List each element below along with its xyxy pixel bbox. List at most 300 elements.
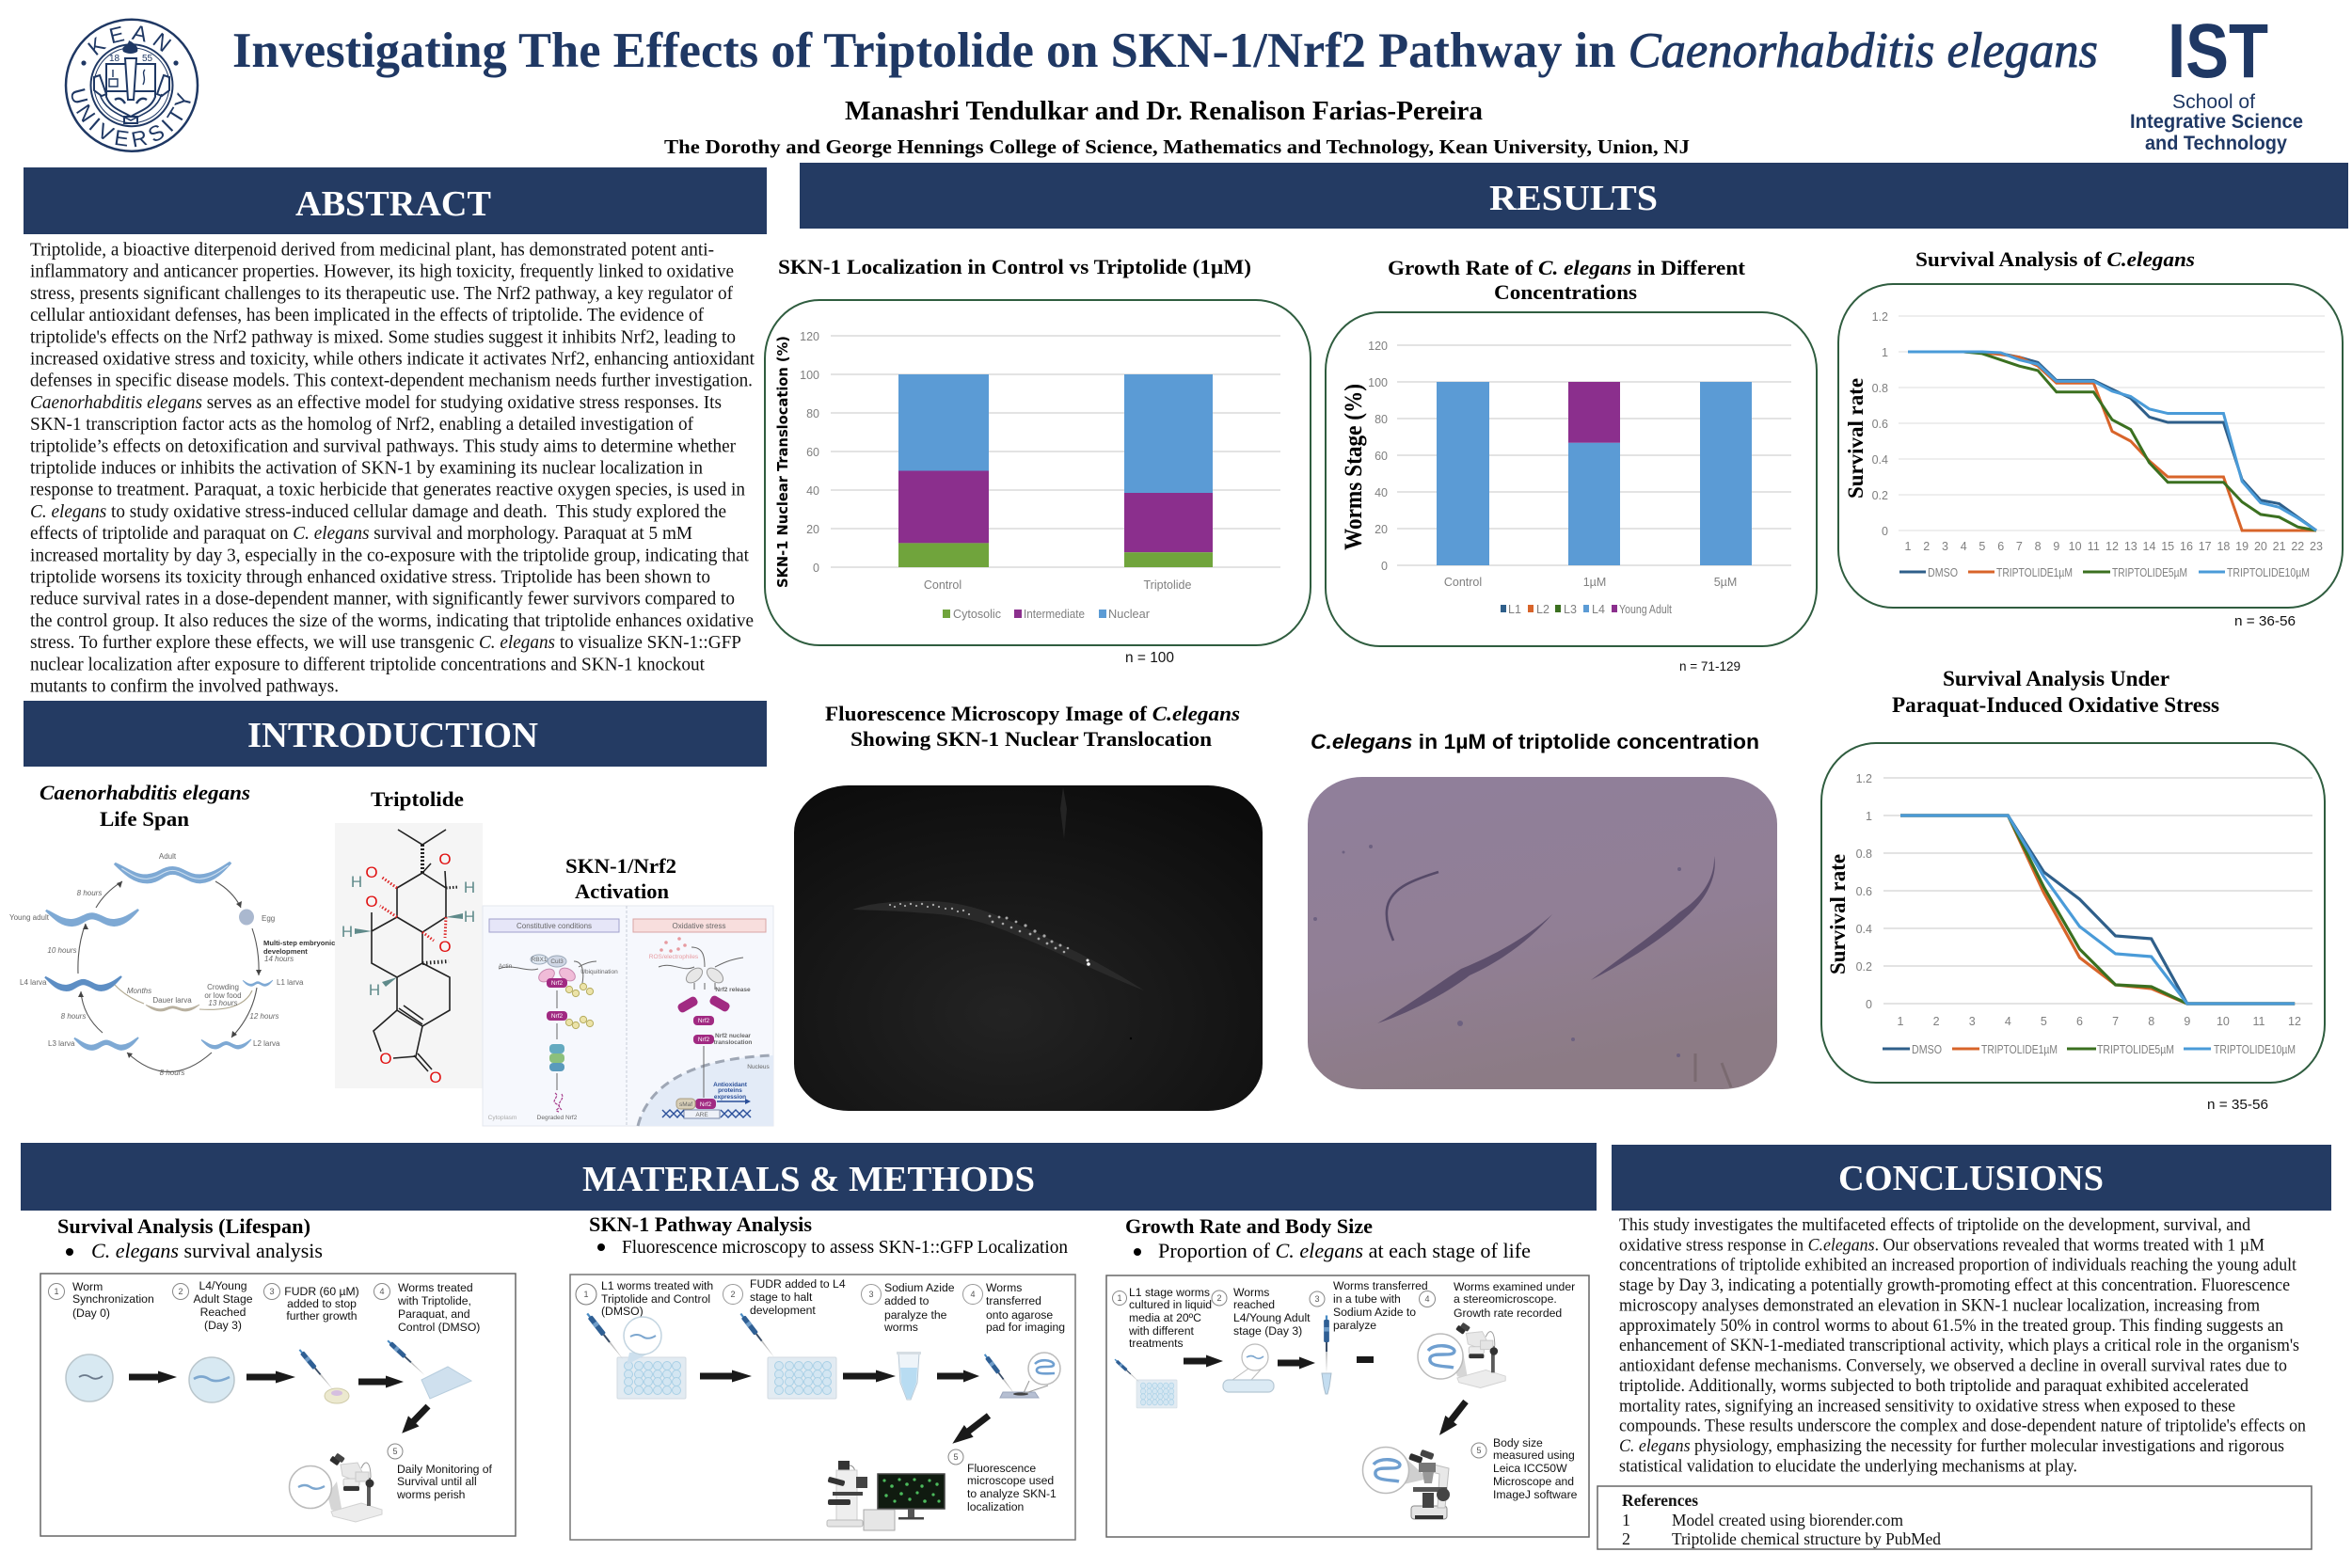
step 5: Leica ICC50W bbox=[1493, 1462, 1567, 1475]
heading: survival analysis chart: Survival Analysis of C.elegans bbox=[1915, 247, 2195, 271]
line chart: survival analysis: 18 bbox=[2217, 540, 2230, 553]
step 3: worms bbox=[883, 1321, 918, 1334]
diagram: SKN-1/Nrf2 activation pathway: Nrf2 bbox=[551, 1013, 564, 1020]
bar chart: SKN-1 localization: 60 bbox=[806, 446, 819, 459]
annotation: n = 36-56: n = 36-56 bbox=[2234, 613, 2296, 629]
diagram: C. elegans life cycle: L1 larva bbox=[277, 978, 304, 987]
arrow bbox=[947, 1410, 993, 1449]
step 4: Worms bbox=[986, 1281, 1022, 1294]
line chart: survival analysis: 8 bbox=[2035, 540, 2042, 553]
text block: conclusions: enhancement of SKN-1-mediated transcriptional activity, which plays a critical role in the organism's bbox=[1619, 1336, 2299, 1355]
step 5: Fluorescence bbox=[967, 1462, 1036, 1475]
diagram: SKN-1/Nrf2 activation pathway: Cytoplasm bbox=[488, 1115, 516, 1121]
legend bbox=[943, 608, 1150, 621]
step 3 bbox=[263, 1283, 359, 1403]
diagram: SKN-1 pathway workflow bbox=[570, 1275, 1075, 1540]
panel: references: Model created using biorender.com bbox=[1672, 1511, 1903, 1529]
step 2: L4/Young Adult bbox=[1233, 1311, 1311, 1324]
step 1: Triptolide and Control bbox=[601, 1292, 710, 1306]
text block: abstract: C. elegans to study oxidative stress-induced cellular damage and death. This study explored the bbox=[30, 501, 726, 522]
heading: C. elegans life span bbox=[40, 781, 250, 831]
heading: paraquat survival chart: Survival Analysis Under bbox=[1943, 667, 2169, 690]
diagram: C. elegans life cycle: or low food bbox=[204, 991, 242, 1000]
line chart: survival analysis: 5 bbox=[1979, 540, 1985, 553]
text block: conclusions: mortality rates, signifying an increased sensitivity to oxidative stress when exposed to these bbox=[1619, 1396, 2235, 1416]
diagram: SKN-1/Nrf2 activation pathway: Degraded Nrf2 bbox=[537, 1115, 578, 1121]
text block: conclusions: triptolide. Additionally, worms subjected to both triptolide and paraquat exhibited accelerated bbox=[1619, 1376, 2249, 1396]
bar chart: SKN-1 localization: 120 bbox=[800, 330, 819, 343]
legend bbox=[1899, 566, 2310, 579]
arrow bbox=[843, 1370, 896, 1383]
arrow bbox=[1278, 1356, 1315, 1370]
step 1 bbox=[49, 1280, 154, 1402]
step 3: 3 bbox=[1314, 1294, 1320, 1304]
heading: SKN-1 localization chart: SKN-1 Localization in Control vs Triptolide (1µM) bbox=[778, 255, 1251, 278]
image: worms at 1µM triptolide bbox=[1308, 777, 1777, 1089]
line chart: survival analysis: 3 bbox=[1942, 540, 1948, 553]
step 3: added to bbox=[884, 1294, 930, 1307]
logo: IST School of Integrative Science and Technology bbox=[2130, 8, 2303, 154]
logo: IST School of Integrative Science and Technology: Integrative Science bbox=[2130, 111, 2303, 133]
step 2 bbox=[1212, 1286, 1311, 1392]
line chart: survival under paraquat: 0.2 bbox=[1856, 960, 1872, 974]
legend: Intermediate bbox=[1024, 608, 1085, 621]
diagram: SKN-1/Nrf2 activation pathway: Nrf2 bbox=[698, 1018, 710, 1024]
step 4 bbox=[1418, 1280, 1575, 1387]
line chart: survival analysis: 0 bbox=[1882, 525, 1888, 538]
text block: abstract: stress, presents significant challenges to its therapeutic use. The Nrf2 pathway, a key regulator of bbox=[30, 283, 733, 304]
line chart: survival analysis: 2 bbox=[1923, 540, 1930, 553]
annotation: n = 71-129: n = 71-129 bbox=[1679, 658, 1740, 673]
step 1: 1 bbox=[54, 1287, 59, 1296]
step 1: (DMSO) bbox=[601, 1305, 644, 1318]
panel: materials and methods header bbox=[21, 1143, 1597, 1211]
text block: abstract: nuclear localization after exposure to different triptolide concentrations and SKN-1 knockout bbox=[30, 654, 705, 674]
line chart: survival analysis: 22 bbox=[2291, 540, 2304, 553]
line chart: survival under paraquat: 11 bbox=[2253, 1015, 2265, 1028]
bars: Triptolide bbox=[1124, 374, 1213, 567]
bar chart: growth rate stages: 120 bbox=[1368, 340, 1388, 353]
step 5: worms perish bbox=[396, 1488, 465, 1501]
diagram: C. elegans life cycle: 13 hours bbox=[208, 999, 238, 1007]
step 5 bbox=[827, 1449, 1057, 1530]
step 4: 4 bbox=[379, 1287, 385, 1296]
step 3: in a tube with bbox=[1333, 1292, 1401, 1306]
step 4: Control (DMSO) bbox=[398, 1321, 480, 1334]
line chart: survival analysis: 12 bbox=[2106, 540, 2119, 553]
diagram: SKN-1/Nrf2 activation pathway: Nrf2 release bbox=[715, 987, 751, 993]
arrow fragment bbox=[1357, 1356, 1374, 1363]
logo: Kean University seal: 18 bbox=[109, 54, 120, 64]
panel: results header bbox=[800, 163, 2348, 229]
step 1 bbox=[1112, 1286, 1212, 1408]
diagram: SKN-1/Nrf2 activation pathway: Nucleus bbox=[747, 1064, 770, 1070]
diagram: SKN-1/Nrf2 activation pathway: sMaf bbox=[679, 1101, 692, 1108]
diagram: C. elegans life cycle: Dauer larva bbox=[152, 996, 192, 1005]
bar chart: SKN-1 localization: 40 bbox=[806, 484, 819, 498]
text block: abstract: the control group. It also reduces the size of the worms, indicating that triptolide enhances oxidative bbox=[30, 610, 754, 631]
bar chart: growth rate stages: Control bbox=[1444, 576, 1482, 589]
bar chart: growth rate stages: 5µM bbox=[1714, 576, 1737, 589]
diagram: SKN-1/Nrf2 activation pathway: proteins bbox=[718, 1087, 742, 1094]
panel: introduction header: INTRODUCTION bbox=[247, 716, 538, 755]
step 1 bbox=[576, 1279, 713, 1399]
diagram: triptolide chemical structure: O bbox=[429, 1069, 442, 1086]
heading: survival analysis method bbox=[57, 1214, 323, 1262]
text block: abstract: response to treatment. Paraquat, a toxic herbicide that generates reactive oxygen species, is used in bbox=[30, 480, 745, 500]
step 4: a stereomicroscope. bbox=[1454, 1292, 1557, 1306]
diagram: C. elegans life cycle: Crowding bbox=[207, 983, 239, 991]
diagram: C. elegans life cycle: Adult bbox=[159, 852, 177, 861]
heading: SKN-1/Nrf2 activation: Activation bbox=[575, 879, 669, 903]
authors: Manashri Tendulkar and Dr. Renalison Farias-Pereira bbox=[845, 97, 1483, 126]
line chart: survival analysis: 7 bbox=[2016, 540, 2023, 553]
text block: abstract bbox=[30, 239, 755, 696]
legend: Nuclear bbox=[1108, 608, 1150, 621]
diagram: SKN-1/Nrf2 activation pathway: RBX1 bbox=[532, 957, 548, 963]
arrow bbox=[700, 1370, 752, 1383]
bars: concentrations bbox=[1437, 382, 1752, 565]
diagram: SKN-1/Nrf2 activation pathway: expression bbox=[714, 1094, 746, 1101]
diagram: growth rate workflow bbox=[1106, 1275, 1589, 1537]
step 3 bbox=[1310, 1279, 1428, 1394]
diagram: SKN-1/Nrf2 activation pathway: ARE bbox=[695, 1112, 708, 1118]
logo: Kean University seal: 55 bbox=[142, 54, 153, 64]
arrow bbox=[246, 1371, 295, 1383]
bar chart: growth rate stages: Worms Stage (%) bbox=[1340, 384, 1367, 550]
step 4: pad for imaging bbox=[986, 1321, 1065, 1334]
step 4 bbox=[374, 1281, 480, 1399]
text block: abstract: cellular antioxidant defenses, has been implicated in the effects of triptolide. The evidence of bbox=[30, 305, 704, 325]
step 4: transferred bbox=[986, 1294, 1041, 1307]
bar chart: growth rate stages: 20 bbox=[1375, 523, 1388, 536]
heading: SKN-1 pathway method: Fluorescence microscopy to assess SKN-1::GFP Localization bbox=[622, 1237, 1068, 1258]
step 2: (Day 3) bbox=[204, 1319, 242, 1332]
diagram: SKN-1/Nrf2 activation pathway: Nrf2 bbox=[700, 1101, 712, 1108]
heading: SKN-1/Nrf2 activation bbox=[565, 854, 676, 903]
heading: Triptolide: Triptolide bbox=[371, 787, 464, 811]
diagram: C. elegans life cycle bbox=[9, 852, 335, 1077]
step 2: stage (Day 3) bbox=[1233, 1324, 1302, 1338]
text block: conclusions: concentrations of triptolide exhibited an increased proportion of individuals reaching the young adult bbox=[1619, 1256, 2297, 1275]
step 1: L1 stage worms bbox=[1129, 1286, 1210, 1299]
step 1: Synchronization bbox=[72, 1292, 154, 1306]
line chart: survival analysis: 14 bbox=[2143, 540, 2155, 553]
diagram: SKN-1/Nrf2 activation pathway: Nrf2 nuclear bbox=[715, 1033, 751, 1039]
step 1: L1 worms treated with bbox=[601, 1279, 713, 1292]
line chart: survival under paraquat: 0 bbox=[1866, 998, 1872, 1011]
line chart: survival analysis: 15 bbox=[2161, 540, 2174, 553]
diagram: C. elegans life cycle: development bbox=[263, 947, 308, 956]
diagram: C. elegans life cycle: L4 larva bbox=[20, 978, 47, 987]
diagram: triptolide chemical structure: O bbox=[365, 863, 378, 881]
diagram: C. elegans life cycle: 14 hours bbox=[264, 955, 294, 963]
step 5: Daily Monitoring of bbox=[397, 1463, 493, 1476]
bar chart: growth rate stages: 1µM bbox=[1583, 576, 1606, 589]
step 4: Worms treated bbox=[398, 1281, 473, 1294]
step 1: 1 bbox=[583, 1290, 589, 1299]
line chart: survival analysis: 0.2 bbox=[1872, 489, 1888, 502]
bar chart: SKN-1 localization: 100 bbox=[800, 369, 819, 382]
heading: paraquat survival chart: Paraquat-Induced Oxidative Stress bbox=[1892, 693, 2219, 717]
logo: IST School of Integrative Science and Technology: and Technology bbox=[2145, 133, 2287, 154]
line chart: survival analysis: 13 bbox=[2124, 540, 2137, 553]
step 2: Adult Stage bbox=[193, 1292, 253, 1306]
step 3: 3 bbox=[269, 1287, 275, 1296]
step 5: 5 bbox=[953, 1452, 959, 1462]
step 4: Worms examined under bbox=[1454, 1280, 1575, 1293]
bar chart: growth rate stages: 80 bbox=[1375, 413, 1388, 426]
step 4: with Triptolide, bbox=[397, 1294, 471, 1307]
text block: conclusions: stage by Day 3, indicating a potentially growth-promoting effect at this concentration. Fluorescence bbox=[1619, 1275, 2290, 1295]
diagram: triptolide chemical structure: O bbox=[438, 938, 452, 956]
text block: abstract: Triptolide, a bioactive diterpenoid derived from medicinal plant, has demonstrated potent anti- bbox=[30, 239, 714, 260]
panel: references: Triptolide chemical structure by PubMed bbox=[1672, 1529, 1941, 1548]
text block: abstract: defenses in specific disease models. This context-dependent mechanism needs further investigation. bbox=[30, 371, 753, 391]
arrow bbox=[1434, 1397, 1471, 1440]
panel: references bbox=[1597, 1486, 2312, 1549]
text block: abstract: increased oxidative stress and toxicity, while others indicate it activates Nrf2, enhancing antioxidant bbox=[30, 348, 755, 369]
step 2 bbox=[723, 1277, 846, 1399]
arrow bbox=[358, 1375, 404, 1388]
step 3: added to stop bbox=[287, 1297, 357, 1310]
heading: survival analysis method: C. elegans survival analysis bbox=[91, 1239, 323, 1262]
step 5: ImageJ software bbox=[1493, 1488, 1578, 1501]
line chart: survival analysis: 20 bbox=[2254, 540, 2267, 553]
line chart: survival analysis: 1.2 bbox=[1872, 310, 1888, 324]
step 3: 3 bbox=[868, 1290, 874, 1299]
heading: survival analysis method: Survival Analysis (Lifespan) bbox=[57, 1214, 310, 1238]
bar chart: growth rate stages: 0 bbox=[1381, 560, 1388, 573]
step 1: 1 bbox=[1117, 1293, 1122, 1303]
line chart: survival analysis: 9 bbox=[2053, 540, 2059, 553]
heading: growth rate chart bbox=[1388, 256, 1746, 304]
text block: abstract: triptolide’s effects on detoxification and survival pathways. This study aims to determine whether bbox=[30, 436, 736, 456]
diagram: C. elegans life cycle: 8 hours bbox=[160, 1069, 184, 1077]
arrow bbox=[396, 1401, 434, 1438]
diagram: survival analysis workflow bbox=[40, 1274, 516, 1536]
diagram: triptolide chemical structure: H bbox=[464, 908, 475, 926]
text block: abstract: triptolide's effects on the Nrf2 pathway is mixed. Some studies suggest it inhibits Nrf2, leading to bbox=[30, 326, 736, 347]
legend: TRIPTOLIDE1µM bbox=[1981, 1043, 2058, 1056]
bar chart: SKN-1 localization: Triptolide bbox=[1144, 578, 1192, 592]
legend: L3 bbox=[1564, 603, 1577, 616]
step 1: Worm bbox=[72, 1280, 103, 1293]
diagram: triptolide chemical structure: H bbox=[369, 981, 380, 999]
arrow bbox=[1184, 1354, 1223, 1368]
step 3: Sodium Azide bbox=[884, 1281, 955, 1294]
line chart: survival under paraquat: 4 bbox=[2005, 1015, 2011, 1028]
logo: IST School of Integrative Science and Technology: IST bbox=[2168, 8, 2268, 94]
step 5: Microscope and bbox=[1493, 1475, 1574, 1488]
diagram: SKN-1/Nrf2 activation pathway: Constitutive conditions bbox=[516, 922, 592, 930]
panel: conclusions header bbox=[1612, 1145, 2331, 1211]
legend: TRIPTOLIDE5µM bbox=[2097, 1043, 2174, 1056]
panel: conclusions header: CONCLUSIONS bbox=[1838, 1159, 2104, 1198]
bar chart: growth rate stages: 100 bbox=[1368, 376, 1388, 389]
step 5: 5 bbox=[392, 1447, 398, 1456]
legend: TRIPTOLIDE5µM bbox=[2112, 566, 2187, 579]
diagram: C. elegans life cycle: 8 hours bbox=[61, 1012, 86, 1021]
series lines bbox=[1900, 816, 2295, 1004]
diagram: SKN-1/Nrf2 activation pathway bbox=[483, 906, 773, 1126]
step 4: Growth rate recorded bbox=[1454, 1307, 1562, 1320]
step 5: Body size bbox=[1493, 1436, 1543, 1449]
bar chart: growth rate stages bbox=[1326, 312, 1817, 646]
bar chart: SKN-1 localization: Control bbox=[924, 578, 961, 592]
line chart: survival analysis: 23 bbox=[2310, 540, 2323, 553]
diagram: triptolide chemical structure: H bbox=[351, 873, 362, 891]
line chart: survival under paraquat: 1 bbox=[1898, 1015, 1904, 1028]
step 2: 2 bbox=[1216, 1293, 1222, 1303]
heading: C. elegans life span: Life Span bbox=[100, 807, 189, 831]
step 1: media at 20ºC bbox=[1129, 1311, 1201, 1324]
diagram: C. elegans life cycle: 10 hours bbox=[47, 946, 77, 955]
step 3: further growth bbox=[286, 1309, 358, 1323]
legend: DMSO bbox=[1928, 566, 1958, 579]
step 2: FUDR added to L4 bbox=[750, 1277, 846, 1291]
diagram: SKN-1/Nrf2 activation pathway: Nrf2 bbox=[551, 980, 564, 987]
text block: conclusions: compounds. These results underscore the complex and dose-dependent nature of triptolide's effects on bbox=[1619, 1417, 2306, 1436]
step 1: (Day 0) bbox=[72, 1307, 110, 1320]
text block: abstract: inflammatory and anticancer properties. However, its high toxicity, frequently linked to oxidative bbox=[30, 261, 734, 282]
line chart: survival analysis: 6 bbox=[1997, 540, 2004, 553]
panel: introduction header bbox=[24, 701, 767, 767]
step 3: paralyze bbox=[1333, 1319, 1376, 1332]
text block: conclusions: approximately 50% in control worms to about 61.5% in the treated group. This finding suggests an bbox=[1619, 1316, 2283, 1336]
heading: SKN-1 pathway method: SKN-1 Pathway Analysis bbox=[589, 1212, 812, 1236]
logo: Kean University seal: KEAN bbox=[87, 25, 171, 55]
text block: abstract: reduce survival rates in a dose-dependent manner, with significantly fewer survivors compared to bbox=[30, 589, 735, 610]
step 2: Worms bbox=[1233, 1286, 1269, 1299]
line chart: survival under paraquat: 3 bbox=[1969, 1015, 1976, 1028]
line chart: survival analysis: Survival rate bbox=[1844, 378, 1867, 499]
bar chart: SKN-1 localization: 20 bbox=[806, 523, 819, 536]
affiliation: The Dorothy and George Hennings College of Science, Mathematics and Technology, Kean University, Union, NJ bbox=[664, 135, 1690, 158]
diagram: C. elegans life cycle: 12 hours bbox=[249, 1012, 279, 1021]
panel: results header: RESULTS bbox=[1489, 179, 1658, 218]
text block: abstract: increased mortality by day 3, especially in the co-exposure with the triptolide group, indicating that bbox=[30, 545, 749, 565]
step 1: cultured in liquid bbox=[1129, 1298, 1212, 1311]
text block: abstract: Caenorhabditis elegans serves as an effective model for studying oxidative stress responses. Its bbox=[30, 392, 722, 413]
step 2: reached bbox=[1233, 1298, 1275, 1311]
step 5 bbox=[1362, 1436, 1578, 1519]
step 3 bbox=[862, 1281, 955, 1400]
diagram: C. elegans life cycle: L3 larva bbox=[48, 1039, 75, 1048]
text block: conclusions bbox=[1619, 1215, 2306, 1476]
diagram: SKN-1/Nrf2 activation pathway: Nrf2 bbox=[698, 1037, 710, 1043]
text block: abstract: mutants to confirm the involved pathways. bbox=[30, 675, 339, 696]
line chart: survival analysis: 0.4 bbox=[1872, 453, 1888, 467]
line chart: survival under paraquat: 6 bbox=[2076, 1015, 2083, 1028]
heading: fluorescence microscopy image: Fluorescence Microscopy Image of C.elegans bbox=[825, 702, 1240, 725]
text block: abstract: triptolide worsens its toxicity through enhanced oxidative stress. Triptolide has been shown to bbox=[30, 566, 710, 587]
arrow bbox=[937, 1370, 979, 1383]
step 2: development bbox=[750, 1304, 816, 1317]
heading: fluorescence microscopy image: Showing SKN-1 Nuclear Translocation bbox=[850, 727, 1212, 751]
annotation: n = 35-56: n = 35-56 bbox=[2207, 1097, 2268, 1113]
step 1: with different bbox=[1128, 1324, 1194, 1338]
step 5 bbox=[290, 1444, 493, 1522]
step 1: treatments bbox=[1129, 1337, 1184, 1350]
step 2: 2 bbox=[178, 1287, 183, 1296]
legend bbox=[1883, 1043, 2296, 1056]
panel: references: 2 bbox=[1622, 1529, 1630, 1548]
step 4: 4 bbox=[970, 1290, 976, 1299]
bar chart: growth rate stages: 60 bbox=[1375, 450, 1388, 463]
diagram: C. elegans life cycle: Multi-step embryonic bbox=[263, 939, 335, 947]
diagram: SKN-1/Nrf2 activation pathway: Ubiquitination bbox=[580, 969, 618, 975]
bar chart: SKN-1 localization bbox=[765, 300, 1311, 645]
line chart: survival under paraquat: 7 bbox=[2112, 1015, 2119, 1028]
diagram: SKN-1/Nrf2 activation pathway: Cul3 bbox=[550, 958, 564, 965]
panel: references: 1 bbox=[1622, 1511, 1630, 1529]
line chart: survival under paraquat: Survival rate bbox=[1826, 854, 1850, 974]
heading: growth rate method bbox=[1125, 1214, 1531, 1262]
microscope and monitor bbox=[827, 1461, 945, 1530]
heading: fluorescence microscopy image bbox=[825, 702, 1240, 751]
image: fluorescence micrograph of worm bbox=[794, 785, 1263, 1111]
bars: Control bbox=[898, 374, 989, 567]
logo: Kean University seal bbox=[64, 19, 199, 152]
step 4: onto agarose bbox=[986, 1308, 1053, 1322]
legend: Young Adult bbox=[1619, 603, 1672, 616]
line chart: survival analysis: 4 bbox=[1961, 540, 1967, 553]
line chart: survival under paraquat: 1 bbox=[1866, 810, 1872, 823]
panel: materials and methods header: MATERIALS & METHODS bbox=[582, 1160, 1035, 1199]
heading: worms in triptolide: C.elegans in 1µM of triptolide concentration bbox=[1311, 730, 1759, 753]
line chart: survival under paraquat: 5 bbox=[2041, 1015, 2047, 1028]
diagram: SKN-1/Nrf2 activation pathway: Oxidative stress bbox=[673, 922, 725, 930]
diagram: SKN-1/Nrf2 activation pathway: Actin bbox=[499, 963, 513, 970]
step 2: Reached bbox=[200, 1306, 246, 1319]
heading: growth rate method: Proportion of C. elegans at each stage of life bbox=[1158, 1239, 1531, 1262]
text block: abstract: effects of triptolide and paraquat on C. elegans survival and morphology. Paraquat at 5 mM bbox=[30, 523, 692, 544]
diagram: triptolide chemical structure: O bbox=[379, 1050, 392, 1068]
legend: Cytosolic bbox=[953, 608, 1001, 621]
logo: Kean University seal: UNIVERSITY bbox=[72, 88, 191, 147]
text block: conclusions: microscopy analyses demonstrated an elevation in SKN-1 nuclear localization, increasing from bbox=[1619, 1296, 2260, 1315]
line chart: survival analysis: 17 bbox=[2199, 540, 2212, 553]
line chart: survival under paraquat: 0.4 bbox=[1856, 923, 1872, 936]
heading: paraquat survival chart bbox=[1892, 667, 2219, 717]
line chart: survival under paraquat: 0.8 bbox=[1856, 847, 1872, 861]
legend: TRIPTOLIDE10µM bbox=[2227, 566, 2310, 579]
line chart: survival analysis: 1 bbox=[1905, 540, 1912, 553]
line chart: survival under paraquat: 12 bbox=[2288, 1015, 2301, 1028]
line chart: survival analysis: 0.6 bbox=[1872, 418, 1888, 431]
step 5: Survival until all bbox=[397, 1475, 477, 1488]
diagram: triptolide chemical structure: O bbox=[438, 850, 452, 868]
diagram: C. elegans life cycle: L2 larva bbox=[253, 1039, 280, 1048]
heading: SKN-1 pathway method bbox=[589, 1212, 1068, 1258]
worm: adult bbox=[115, 863, 230, 882]
diagram: C. elegans life cycle: Young adult bbox=[9, 913, 50, 922]
line chart: survival under paraquat: 8 bbox=[2148, 1015, 2154, 1028]
line chart: survival under paraquat: 9 bbox=[2184, 1015, 2190, 1028]
legend: TRIPTOLIDE1µM bbox=[1996, 566, 2073, 579]
text block: conclusions: statistical validation to elucidate the underlying mechanisms at play. bbox=[1619, 1456, 2077, 1476]
text block: conclusions: C. elegans physiology, emphasizing the necessity for further molecular investigations and rigorous bbox=[1619, 1436, 2284, 1456]
line chart: survival analysis: 1 bbox=[1882, 346, 1888, 359]
panel: references: References bbox=[1622, 1491, 1698, 1510]
line chart: survival under paraquat: 2 bbox=[1933, 1015, 1940, 1028]
step 5: microscope used bbox=[967, 1474, 1054, 1487]
text block: conclusions: This study investigates the multifaceted effects of triptolide on the development, survival, and bbox=[1619, 1215, 2250, 1235]
line chart: survival under paraquat: 10 bbox=[2217, 1015, 2230, 1028]
bar chart: SKN-1 localization: 0 bbox=[813, 562, 819, 575]
step 3: FUDR (60 µM) bbox=[284, 1285, 359, 1298]
